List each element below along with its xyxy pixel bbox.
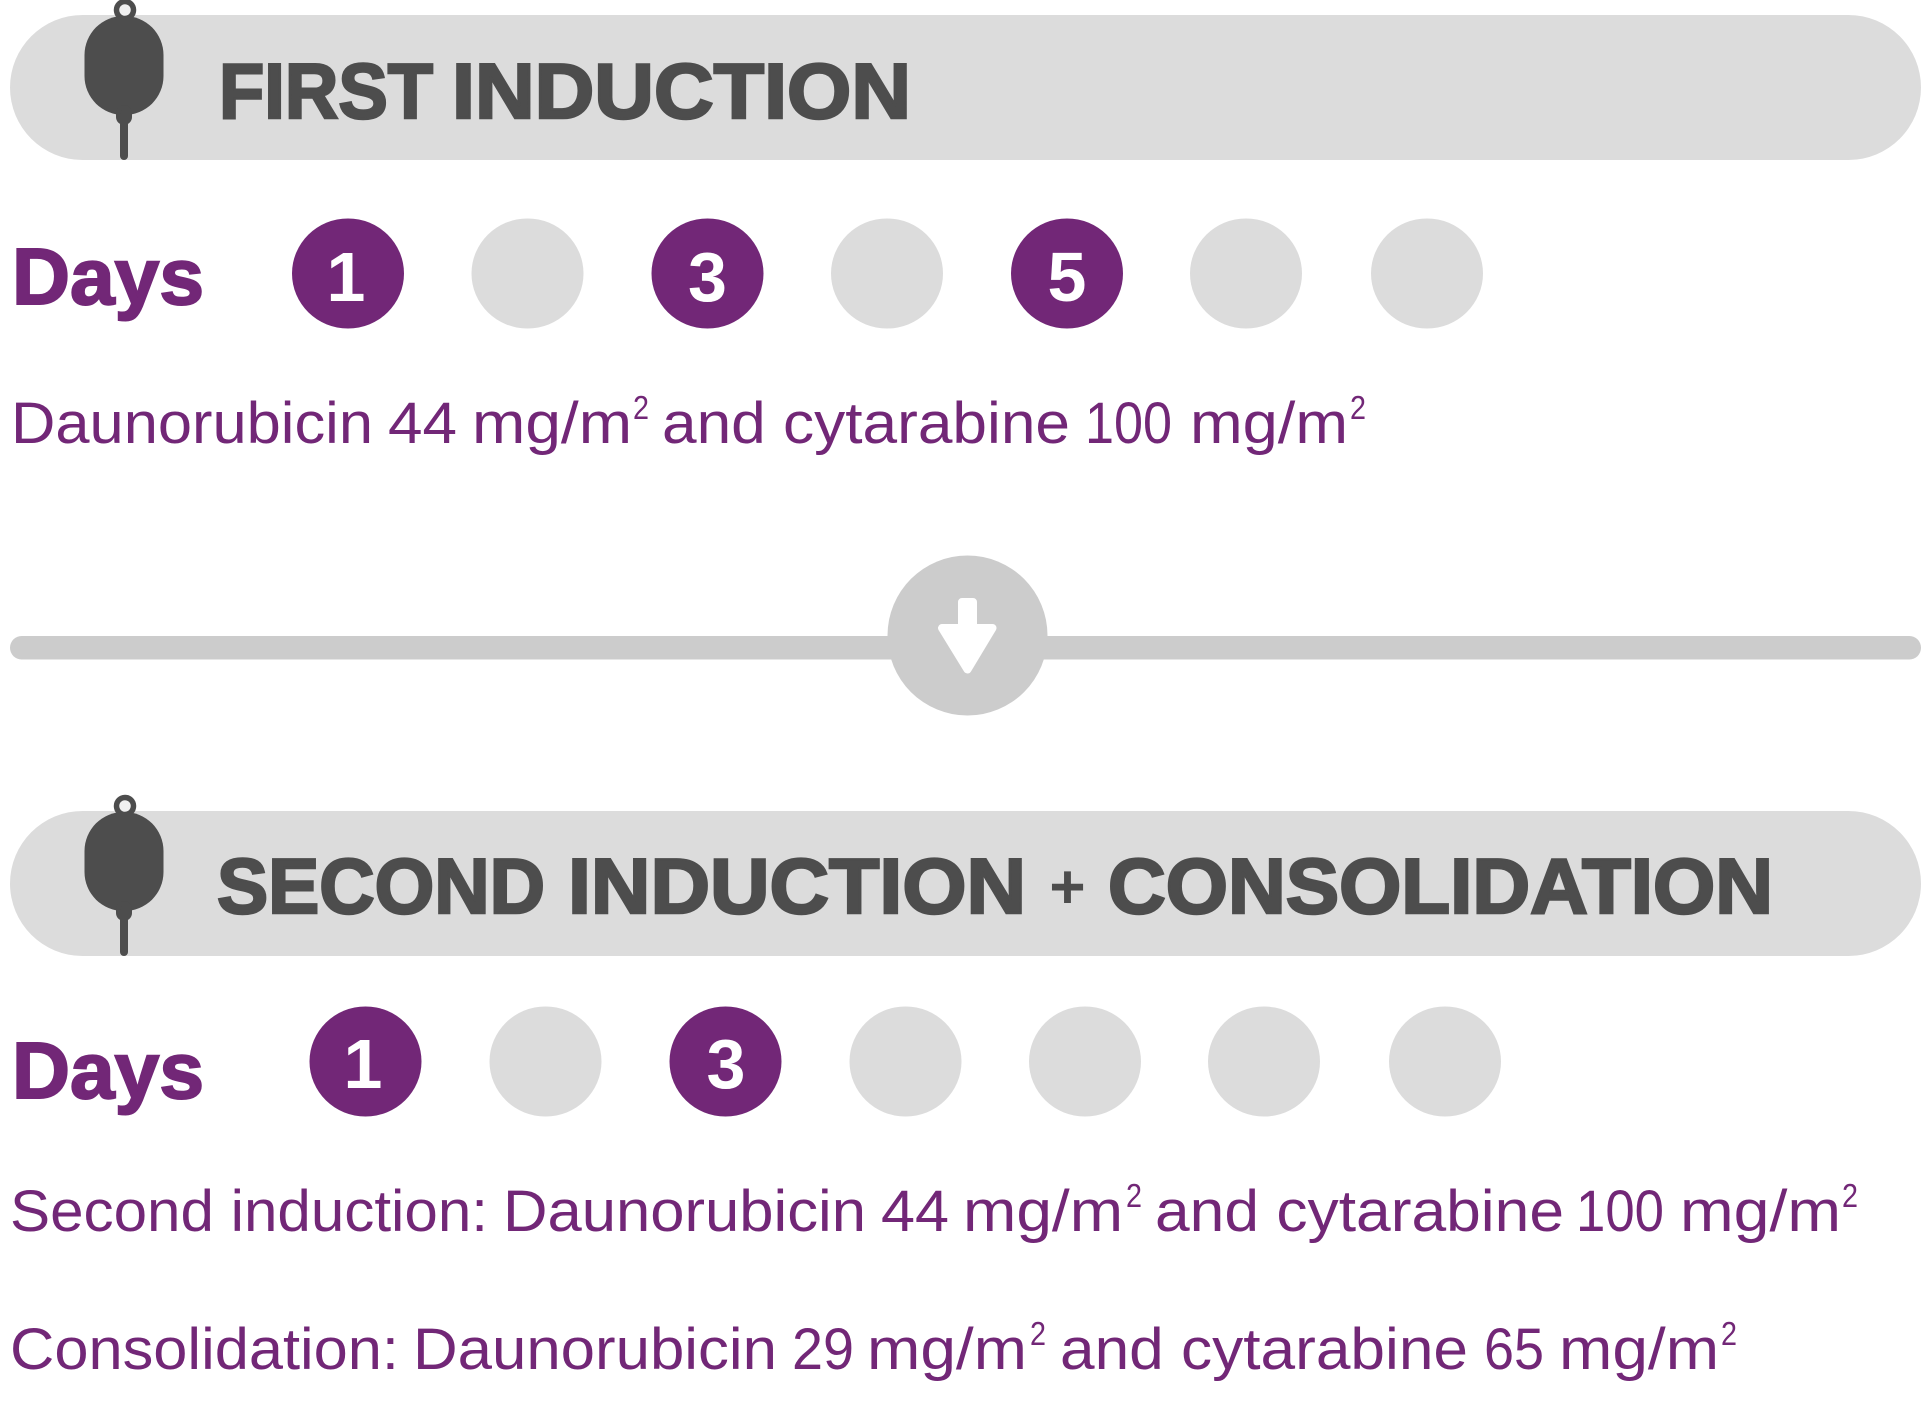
dose text: consolidation: mg/m — [867, 1317, 1027, 1382]
dose text: second induction: 44 — [881, 1179, 949, 1244]
day 4 marker — [850, 1006, 962, 1116]
dose text: consolidation: Daunorubicin — [413, 1317, 777, 1382]
dose text: first induction: mg/m — [472, 391, 632, 456]
day 1 marker — [292, 218, 404, 328]
divider with down arrow — [10, 556, 1921, 716]
label: days: Days — [12, 232, 204, 321]
dose text: first induction: and cytarabine — [662, 391, 1070, 456]
day 7 marker — [1389, 1006, 1501, 1116]
dose text: consolidation: 65 — [1484, 1317, 1544, 1382]
panel: first induction — [10, 2, 1921, 456]
day 1 marker: 1 — [344, 1025, 382, 1103]
dose text: first induction: 2 — [1350, 389, 1366, 426]
day 1 marker: 1 — [327, 238, 365, 316]
dose text: first induction — [11, 389, 1366, 456]
day 2 marker — [490, 1006, 602, 1116]
dose text: second induction: Second induction: — [10, 1179, 488, 1244]
dose text: first induction: Daunorubicin — [11, 391, 373, 456]
heading: second induction + consolidation: INDUCTION — [568, 842, 1026, 930]
dose text: first induction: 100 — [1085, 391, 1172, 456]
dose text: consolidation: 29 — [792, 1317, 854, 1382]
panel: second induction + consolidation — [10, 798, 1921, 1382]
day 1 marker — [310, 1006, 422, 1116]
dose text: consolidation: 2 — [1030, 1315, 1046, 1352]
dose text: consolidation: and cytarabine — [1060, 1317, 1468, 1382]
day 2 marker — [472, 218, 584, 328]
heading: second induction + consolidation — [217, 842, 1773, 930]
dose text: consolidation — [10, 1315, 1737, 1382]
icon: IV bag — [84, 798, 164, 956]
day 5 marker — [1029, 1006, 1141, 1116]
heading: first induction: FIRST — [219, 47, 433, 135]
heading: first induction — [219, 47, 911, 135]
dose text: first induction: mg/m — [1190, 391, 1348, 456]
dose text: second induction: Daunorubicin — [503, 1179, 866, 1244]
icon: down arrow — [942, 602, 992, 670]
dose text: second induction — [10, 1177, 1858, 1244]
dose text: second induction: mg/m — [1680, 1179, 1841, 1244]
dose text: second induction: 100 — [1576, 1179, 1664, 1244]
dose text: second induction: 2 — [1126, 1177, 1142, 1214]
day 5 marker: 5 — [1048, 238, 1086, 316]
day 3 marker: 3 — [688, 238, 727, 316]
dose text: second induction: mg/m — [963, 1179, 1123, 1244]
heading: second induction + consolidation: SECOND — [217, 842, 545, 930]
day 3 marker — [652, 218, 764, 328]
dose text: first induction: 44 — [388, 391, 457, 456]
day 3 marker — [670, 1006, 782, 1116]
day 6 marker — [1208, 1006, 1320, 1116]
icon: IV bag — [84, 2, 164, 160]
day 3 marker: 3 — [707, 1025, 745, 1103]
day 6 marker — [1190, 218, 1302, 328]
dose text: consolidation: mg/m — [1559, 1317, 1719, 1382]
day 7 marker — [1371, 218, 1483, 328]
day 5 marker — [1011, 218, 1123, 328]
header bar: first induction — [10, 15, 1921, 160]
dose text: consolidation: 2 — [1721, 1315, 1737, 1352]
heading: first induction: INDUCTION — [452, 47, 911, 135]
dose text: second induction: 2 — [1842, 1177, 1858, 1214]
heading: second induction + consolidation: CONSOLIDATION — [1108, 842, 1773, 930]
dose text: first induction: 2 — [633, 389, 649, 426]
dose text: second induction: and cytarabine — [1155, 1179, 1564, 1244]
heading: second induction + consolidation: + — [1049, 853, 1086, 922]
label: days: Days — [12, 1026, 204, 1115]
day 4 marker — [831, 218, 943, 328]
header bar: second induction + consolidation — [10, 811, 1921, 956]
dose text: consolidation: Consolidation: — [10, 1317, 399, 1382]
